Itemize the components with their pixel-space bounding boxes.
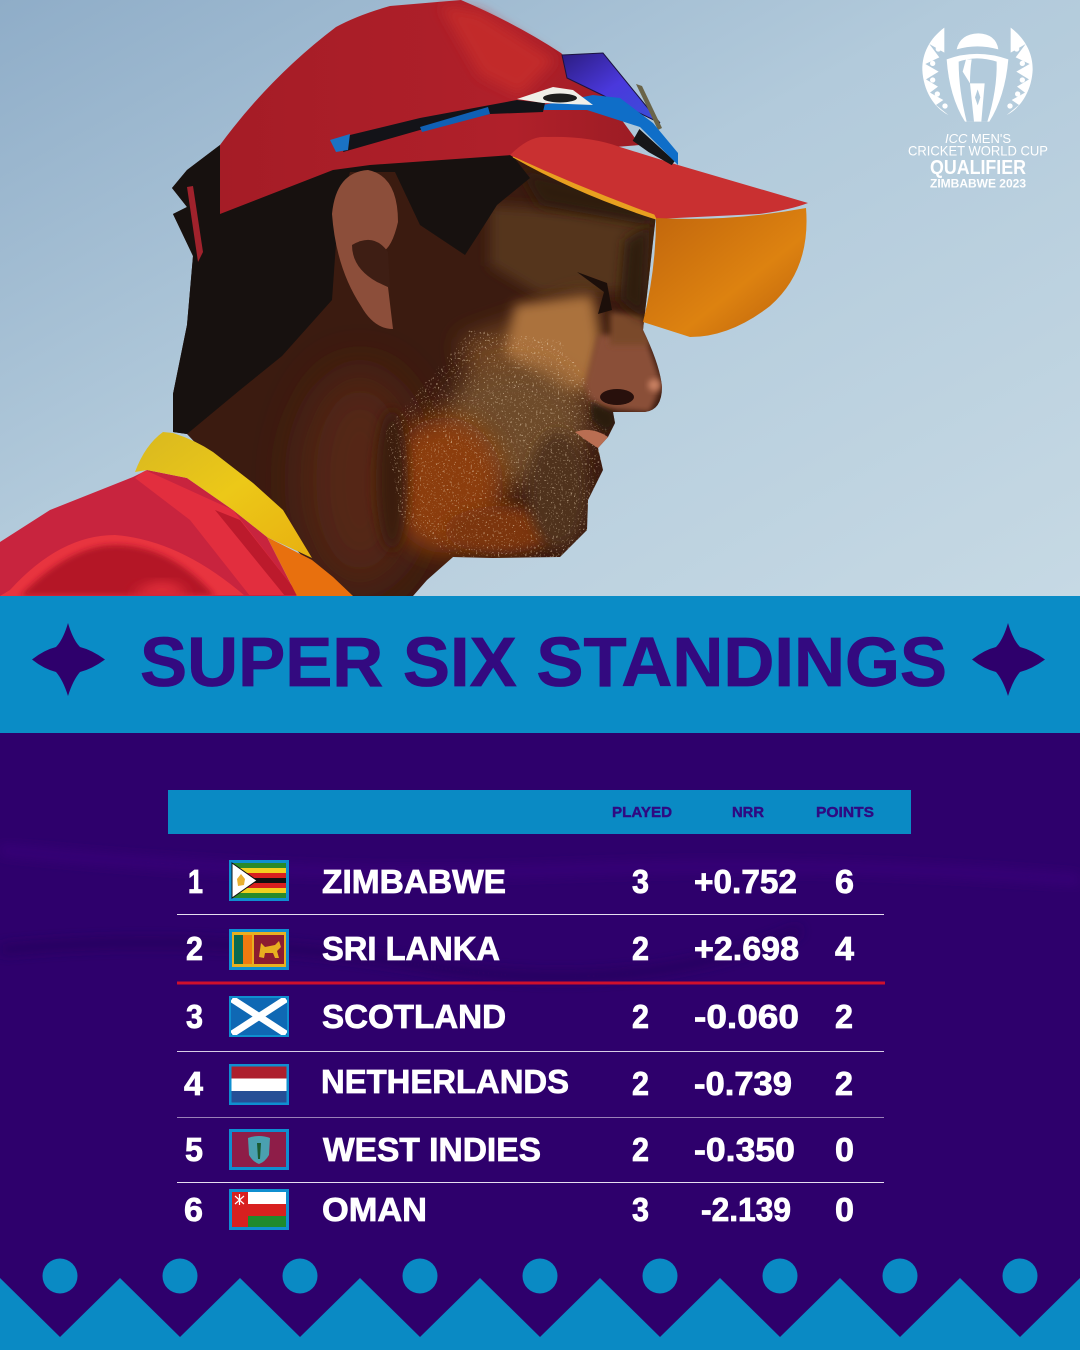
photo: player in red cap against the sky <box>0 0 1080 596</box>
row: West Indies: 0 <box>835 1132 854 1169</box>
row: Scotland: 2 <box>835 999 853 1036</box>
footer pattern: dots and zigzag <box>0 1258 1080 1350</box>
row: Netherlands: 4 <box>184 1066 203 1103</box>
table header <box>168 790 911 834</box>
row: Oman: 6 <box>184 1192 203 1229</box>
row: Netherlands <box>184 1064 853 1105</box>
flag: Zimbabwe <box>229 860 289 901</box>
flag: Netherlands <box>229 1064 289 1105</box>
row: West Indies: 5 <box>185 1132 203 1169</box>
row: Oman <box>184 1189 854 1230</box>
row: Scotland: 2 <box>632 999 649 1036</box>
row: Sri Lanka: SRI LANKA <box>322 931 500 968</box>
banner star left <box>32 623 105 696</box>
flag: West Indies <box>229 1129 289 1170</box>
row: Scotland: -0.060 <box>694 999 799 1036</box>
collar <box>135 432 353 596</box>
jersey <box>0 470 300 596</box>
row: Sri Lanka: 2 <box>186 931 203 968</box>
row: Oman: 3 <box>632 1192 649 1229</box>
tournament logo <box>908 28 1048 191</box>
table header: PLAYED <box>612 805 672 821</box>
logo text: ICC MEN'S <box>945 131 1011 146</box>
logo text: CRICKET WORLD CUP <box>908 142 1048 158</box>
sunglasses <box>330 53 678 165</box>
row: Oman: -2.139 <box>701 1192 791 1229</box>
logo crest <box>922 28 1033 122</box>
row: Netherlands: 2 <box>835 1066 853 1103</box>
row: Sri Lanka <box>186 929 854 970</box>
hair <box>172 145 530 434</box>
row: Zimbabwe: 3 <box>632 864 649 901</box>
heading: SUPER SIX STANDINGS <box>140 623 947 701</box>
cap back strap <box>187 186 203 262</box>
table header: NRR <box>732 805 765 821</box>
qualification cut-off line <box>177 982 885 984</box>
row: West Indies: 2 <box>632 1132 649 1169</box>
banner star right <box>972 623 1045 696</box>
row: Zimbabwe: ZIMBABWE <box>322 864 506 901</box>
row: Netherlands: NETHERLANDS <box>321 1064 569 1101</box>
row: West Indies: WEST INDIES <box>323 1132 541 1169</box>
row: Zimbabwe: +0.752 <box>694 864 797 901</box>
logo text: ZIMBABWE 2023 <box>930 176 1026 190</box>
row: Sri Lanka: 2 <box>632 931 649 968</box>
row: Oman: 0 <box>835 1192 854 1229</box>
cap <box>220 0 808 337</box>
row: Netherlands: -0.739 <box>694 1066 792 1103</box>
row: Netherlands: 2 <box>632 1066 649 1103</box>
flag: Oman <box>229 1189 289 1230</box>
row: Scotland: 3 <box>186 999 203 1036</box>
row: Scotland: SCOTLAND <box>322 999 506 1036</box>
player head <box>172 145 662 596</box>
flag: Scotland <box>229 996 289 1037</box>
row: Oman: OMAN <box>322 1192 427 1229</box>
logo text <box>908 131 1048 190</box>
row: Zimbabwe: 1 <box>188 864 203 901</box>
bottom background panel <box>0 733 1080 1350</box>
title banner <box>0 596 1080 733</box>
row: Scotland <box>186 996 853 1037</box>
ear <box>332 170 398 329</box>
logo text: QUALIFIER <box>930 157 1026 179</box>
row: West Indies <box>185 1129 854 1170</box>
row: Sri Lanka: 4 <box>835 931 854 968</box>
flag: Sri Lanka <box>229 929 289 970</box>
row: Zimbabwe: 6 <box>835 864 854 901</box>
row: West Indies: -0.350 <box>694 1132 795 1169</box>
table header: POINTS <box>816 805 874 821</box>
row: Sri Lanka: +2.698 <box>694 931 799 968</box>
row: Zimbabwe <box>188 860 854 901</box>
